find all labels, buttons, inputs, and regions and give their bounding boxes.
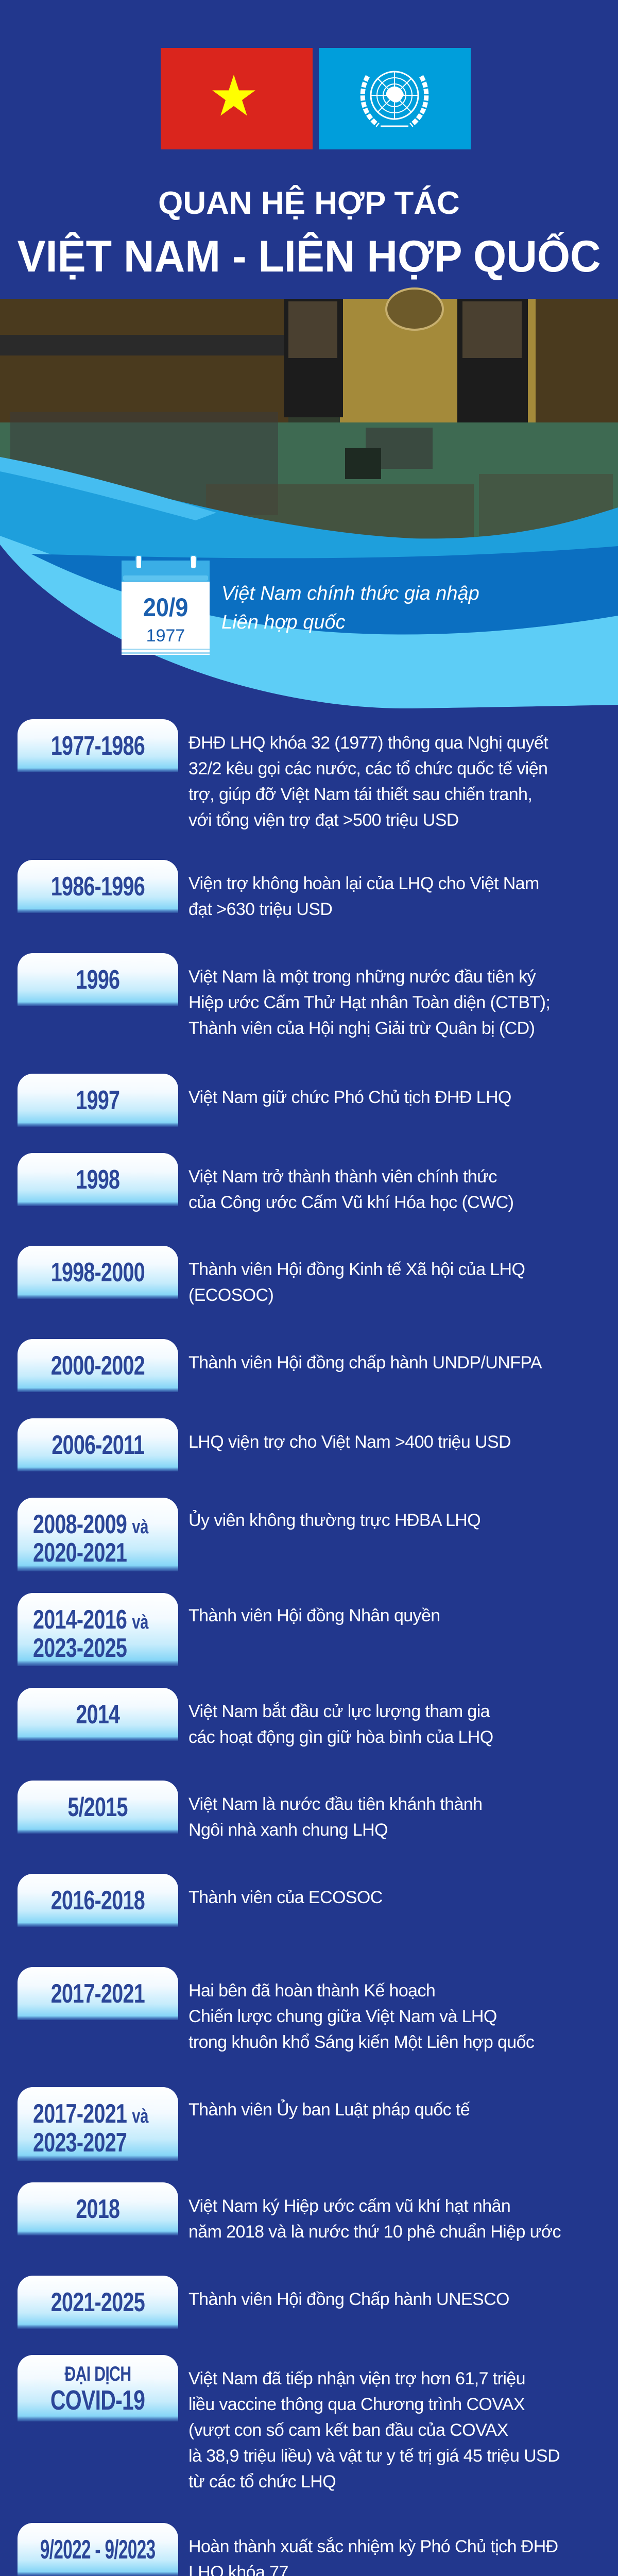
icon: UN emblem bbox=[360, 71, 428, 127]
timeline row: 1986-1996: đạt >630 triệu USD bbox=[188, 900, 332, 919]
timeline row: 2008-2009 và 2020-2021: 2008-2009 và bbox=[33, 1510, 149, 1539]
timeline row: 2016-2018: Thành viên của ECOSOC bbox=[188, 1888, 383, 1907]
title: QUAN HỆ HỢP TÁC bbox=[158, 185, 460, 221]
headline: joined UN: Việt Nam chính thức gia nhập bbox=[221, 583, 479, 604]
timeline row: 2006-2011: LHQ viện trợ cho Việt Nam >400 triệu USD bbox=[188, 1432, 511, 1452]
title: VIỆT NAM - LIÊN HỢP QUỐC bbox=[17, 232, 601, 281]
timeline row: 1998-2000: Thành viên Hội đồng Kinh tế Xã hội của LHQ bbox=[188, 1260, 525, 1279]
timeline row: 2017-2021 và 2023-2027: Thành viên Ủy ban Luật pháp quốc tế bbox=[188, 2100, 470, 2120]
timeline row: 1996 bbox=[18, 953, 550, 1038]
flag: Vietnam bbox=[161, 48, 313, 149]
timeline row: 2018: 2018 bbox=[76, 2194, 119, 2224]
timeline row: 2017-2021 và 2023-2027: 2023-2027 bbox=[33, 2128, 127, 2158]
timeline row: 1998-2000 bbox=[18, 1246, 525, 1305]
timeline row: 1996: Hiệp ước Cấm Thử Hạt nhân Toàn diện (CTBT); bbox=[188, 993, 550, 1012]
timeline row: 2008-2009 và 2020-2021 bbox=[18, 1498, 480, 1571]
timeline row: 1998 bbox=[18, 1153, 513, 1212]
timeline row: 2014-2016 và 2023-2025: 2014-2016 và bbox=[33, 1605, 149, 1635]
flag: United Nations bbox=[319, 48, 471, 149]
timeline row: 2006-2011 bbox=[18, 1418, 511, 1471]
timeline row: 2017-2021: Chiến lược chung giữa Việt Nam và LHQ bbox=[188, 2007, 497, 2026]
timeline row: 9/2022 - 9/2023: Hoàn thành xuất sắc nhiệm kỳ Phó Chủ tịch ĐHĐ bbox=[188, 2537, 558, 2556]
timeline row: 1977-1986: 1977-1986 bbox=[51, 731, 145, 760]
timeline row: 2018: năm 2018 và là nước thứ 10 phê chuẩn Hiệp ước bbox=[188, 2222, 561, 2242]
timeline row: 2016-2018 bbox=[18, 1874, 383, 1927]
timeline row: 2021-2025: 2021-2025 bbox=[51, 2287, 145, 2317]
timeline row: 2014-2016 và 2023-2025: Thành viên Hội đồng Nhân quyền bbox=[188, 1606, 440, 1625]
timeline row: 1998: của Công ước Cấm Vũ khí Hóa học (CWC) bbox=[188, 1193, 513, 1212]
timeline row: 2017-2021 và 2023-2027: 2017-2021 và bbox=[33, 2099, 149, 2129]
timeline row: 2006-2011: 2006-2011 bbox=[52, 1430, 144, 1460]
timeline row: COVID-19: là 38,9 triệu liều) và vật tư y tế trị giá 45 triệu USD bbox=[188, 2446, 560, 2466]
timeline row: 5/2015: Ngôi nhà xanh chung LHQ bbox=[188, 1820, 388, 1840]
timeline row: 5/2015: 5/2015 bbox=[68, 1792, 128, 1822]
timeline row: 5/2015: Việt Nam là nước đầu tiên khánh thành bbox=[188, 1794, 482, 1814]
timeline row: 1977-1986: với tổng viện trợ đạt >500 triệu USD bbox=[188, 810, 459, 830]
timeline row: 2014-2016 và 2023-2025: 2023-2025 bbox=[33, 1633, 127, 1663]
timeline row: 1977-1986: trợ, giúp đỡ Việt Nam tái thiết sau chiến tranh, bbox=[188, 785, 532, 804]
headline: joined UN: Liên hợp quốc bbox=[221, 612, 346, 633]
timeline row: COVID-19: từ các tổ chức LHQ bbox=[188, 2472, 336, 2492]
timeline row: 5/2015 bbox=[18, 1781, 482, 1840]
timeline row: 1997: 1997 bbox=[76, 1085, 119, 1115]
timeline row: 1997: Việt Nam giữ chức Phó Chủ tịch ĐHĐ LHQ bbox=[188, 1088, 511, 1107]
timeline row: 9/2022 - 9/2023: 9/2022 - 9/2023 bbox=[40, 2535, 156, 2565]
timeline row: 1986-1996: 1986-1996 bbox=[51, 872, 145, 902]
timeline row: 2021-2025: Thành viên Hội đồng Chấp hành UNESCO bbox=[188, 2290, 509, 2309]
waves bbox=[0, 457, 618, 732]
timeline row: 2017-2021: trong khuôn khổ Sáng kiến Một Liên hợp quốc bbox=[188, 2032, 534, 2052]
photo: UN General Assembly hall bbox=[0, 289, 618, 546]
timeline row: 1977-1986 bbox=[18, 719, 548, 830]
title bbox=[17, 185, 601, 281]
timeline row: 1977-1986: 32/2 kêu gọi các nước, các tổ chức quốc tế viện bbox=[188, 759, 547, 778]
timeline row: 2017-2021: Hai bên đã hoàn thành Kế hoạch bbox=[188, 1981, 435, 2001]
timeline row: 2014-2016 và 2023-2025 bbox=[18, 1593, 440, 1666]
timeline row: 1977-1986: ĐHĐ LHQ khóa 32 (1977) thông qua Nghị quyết bbox=[188, 733, 548, 753]
headline: joined UN bbox=[221, 583, 479, 633]
header background with photo and waves bbox=[0, 287, 618, 708]
timeline row: 2018: Việt Nam ký Hiệp ước cấm vũ khí hạt nhân bbox=[188, 2196, 510, 2216]
timeline row: 9/2022 - 9/2023 bbox=[18, 2523, 558, 2576]
timeline row: 1998: 1998 bbox=[76, 1164, 119, 1194]
timeline row: 1996: 1996 bbox=[76, 964, 119, 994]
timeline row: 2017-2021 và 2023-2027 bbox=[18, 2087, 470, 2161]
timeline row: 1998-2000: (ECOSOC) bbox=[188, 1285, 273, 1305]
timeline row: 2017-2021 bbox=[18, 1967, 534, 2052]
timeline row: 1996: Thành viên của Hội nghị Giải trừ Quân bị (CD) bbox=[188, 1019, 535, 1038]
timeline row: 2018 bbox=[18, 2182, 561, 2242]
calendar: 20/9 1977: 20/9 bbox=[143, 593, 188, 622]
timeline row: 1997 bbox=[18, 1074, 511, 1127]
timeline row: 1986-1996: Viện trợ không hoàn lại của LHQ cho Việt Nam bbox=[188, 874, 539, 893]
timeline row: 2014: các hoạt động gìn giữ hòa bình của LHQ bbox=[188, 1727, 493, 1747]
calendar: 20/9 1977 bbox=[122, 555, 210, 655]
timeline row: 2021-2025 bbox=[18, 2276, 509, 2329]
timeline row: 1996: Việt Nam là một trong những nước đầu tiên ký bbox=[188, 967, 536, 987]
timeline row: 2008-2009 và 2020-2021: Ủy viên không thường trực HĐBA LHQ bbox=[188, 1511, 480, 1530]
timeline row: COVID-19: COVID-19 bbox=[50, 2384, 145, 2415]
timeline row: COVID-19: liều vaccine thông qua Chương trình COVAX bbox=[188, 2395, 525, 2414]
timeline row: 2014 bbox=[18, 1688, 493, 1747]
timeline row: 2016-2018: 2016-2018 bbox=[51, 1886, 145, 1916]
timeline row: 2000-2002: 2000-2002 bbox=[51, 1351, 145, 1381]
timeline row: COVID-19: ĐẠI DỊCH bbox=[64, 2363, 131, 2385]
timeline row: COVID-19: Việt Nam đã tiếp nhận viện trợ hơn 61,7 triệu bbox=[188, 2369, 525, 2388]
timeline row: 2000-2002: Thành viên Hội đồng chấp hành UNDP/UNFPA bbox=[188, 1353, 542, 1372]
timeline row: 2000-2002 bbox=[18, 1339, 542, 1392]
timeline row: 2014: Việt Nam bắt đầu cử lực lượng tham gia bbox=[188, 1702, 490, 1721]
timeline row: 2014: 2014 bbox=[76, 1699, 119, 1729]
calendar: 20/9 1977: 1977 bbox=[146, 626, 185, 646]
icon: yellow star bbox=[212, 75, 255, 115]
timeline row: COVID-19: (vượt con số cam kết ban đầu của COVAX bbox=[188, 2420, 508, 2440]
timeline row: 2008-2009 và 2020-2021: 2020-2021 bbox=[33, 1538, 127, 1568]
timeline row: 1986-1996 bbox=[18, 860, 539, 919]
timeline row: COVID-19 bbox=[18, 2355, 560, 2492]
timeline row: 2017-2021: 2017-2021 bbox=[51, 1978, 145, 2008]
timeline row: 1998-2000: 1998-2000 bbox=[51, 1257, 145, 1287]
timeline row: 1998: Việt Nam trở thành thành viên chính thức bbox=[188, 1167, 497, 1187]
